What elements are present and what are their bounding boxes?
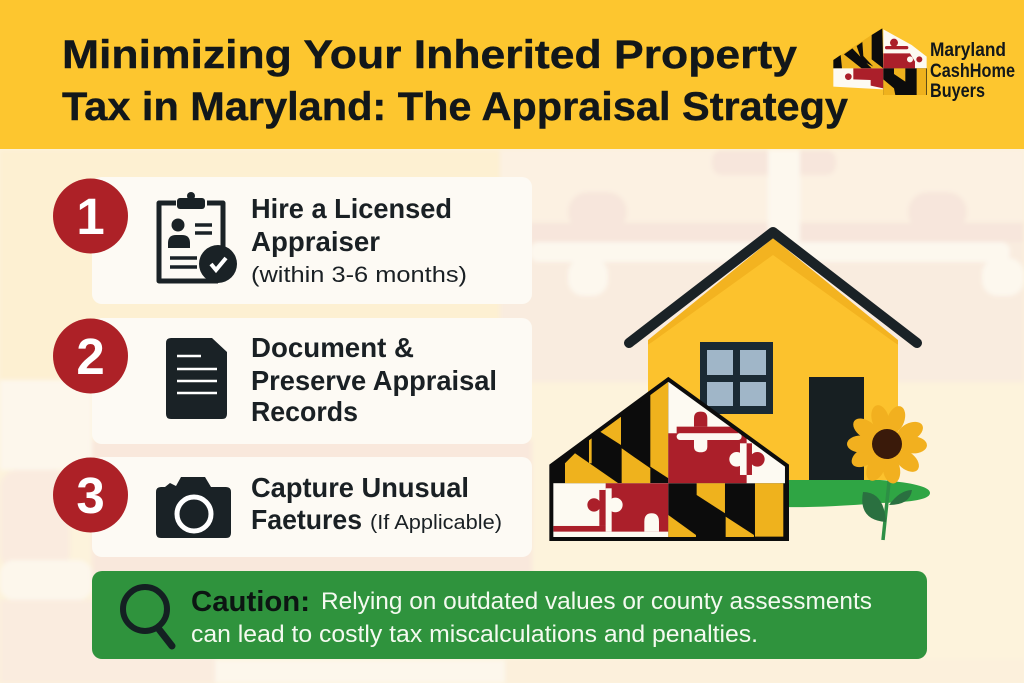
- step 3: [53, 457, 532, 557]
- leaves: [862, 492, 886, 522]
- faded flag background: [0, 145, 1024, 683]
- step 2 text: Preserve Appraisal: [251, 365, 497, 396]
- step 1 text: Hire a Licensed: [251, 193, 452, 224]
- callout text: Caution:: [191, 586, 310, 618]
- title: Minimizing Your Inherited Property: [62, 33, 798, 77]
- card 1: [92, 177, 532, 304]
- number badge 1: 1: [76, 188, 105, 245]
- callout text: Relying on outdated values or county assessments: [321, 588, 872, 615]
- petals: [847, 403, 927, 485]
- step 3 text: Faetures: [251, 504, 362, 535]
- callout text: can lead to costly tax miscalculations and penalties.: [191, 621, 758, 648]
- step 2 text: [251, 332, 497, 427]
- stem: [883, 463, 891, 540]
- callout panel: [92, 571, 927, 659]
- illustration: house: [629, 232, 930, 507]
- number badge 1: [53, 178, 128, 254]
- step 1 text: Appraiser: [251, 226, 380, 257]
- number badge 3: [53, 458, 128, 532]
- lawn: [780, 480, 930, 507]
- icon: camera: [156, 477, 231, 538]
- step 2 text: Document &: [251, 332, 414, 363]
- step 3 text: [251, 472, 502, 535]
- logo: wordmark: Maryland: [930, 40, 1006, 61]
- logo: wordmark: [930, 40, 1015, 102]
- step 1 text: [251, 193, 467, 287]
- number badge 3: 3: [76, 467, 105, 524]
- step 3 text: Capture Unusual: [251, 472, 469, 503]
- flower centre: [872, 429, 902, 459]
- logo: wordmark: Buyers: [930, 81, 985, 102]
- card 3: [92, 457, 532, 557]
- card 2: [92, 318, 532, 444]
- title: Tax in Maryland: The Appraisal Strategy: [62, 85, 849, 129]
- door: [809, 377, 864, 480]
- logo: flag house: [833, 28, 927, 95]
- icon: magnifying glass: [123, 587, 172, 646]
- title: [62, 33, 849, 129]
- logo: [833, 28, 1015, 102]
- illustration: sunflower: [847, 403, 927, 540]
- number badge 2: 2: [76, 328, 105, 385]
- step 2: [53, 318, 532, 444]
- header band: [0, 0, 1024, 149]
- icon: clipboard with check: [159, 192, 237, 283]
- illustration: Maryland flag house: [549, 377, 790, 542]
- caution callout: [92, 571, 927, 659]
- roof shade: [648, 238, 898, 345]
- window: [700, 342, 773, 414]
- roof: [629, 232, 917, 343]
- number badge 2: [53, 318, 128, 394]
- callout text: [191, 586, 872, 648]
- step 3 text: (If Applicable): [370, 512, 502, 534]
- step 2 text: Records: [251, 396, 358, 427]
- house body: [648, 240, 898, 480]
- icon: document: [166, 338, 227, 419]
- step 1 text: (within 3-6 months): [251, 262, 467, 287]
- step 1: [53, 177, 532, 304]
